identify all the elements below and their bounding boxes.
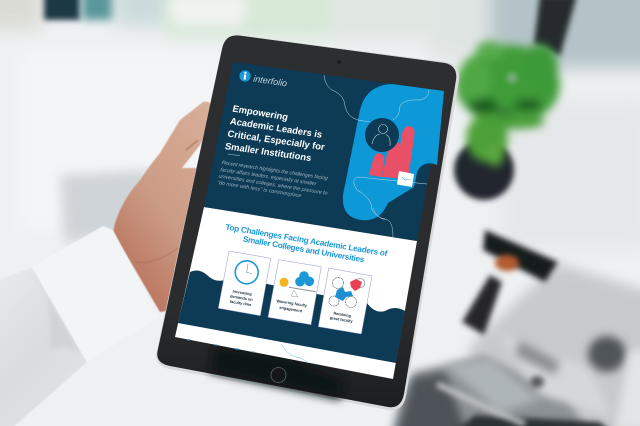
title: Empowering [232,103,290,122]
hand holding tablet [113,102,212,312]
thin blue curve in lower strip [282,344,307,362]
plant in dark pot [454,41,560,200]
thin decorative curve lines [324,75,429,219]
blue rounded shape [343,84,444,220]
intro paragraph [217,160,328,199]
icon: clock [235,261,258,284]
card: increasing demands on faculty time: faculty time [230,299,253,307]
tablet body [156,35,459,410]
title rule [228,154,240,156]
thin curve in navy to wave [373,208,393,237]
panel: navy header [204,62,444,241]
card: wavering faculty engagement: engagement [279,305,303,313]
blurred desk items: paper and laptop [390,230,640,426]
logo: interfolio: interfolio [253,74,288,89]
card: increasing demands on faculty time: Increasing [232,289,253,297]
card: increasing demands on faculty time [218,251,271,316]
icon: envelope card [397,171,414,187]
intro paragraph: "do more with less" is commonplace [217,180,302,199]
cut-off next heading marks [187,339,254,353]
card: wavering faculty engagement [268,260,321,325]
bar chart: red bars [369,126,415,180]
heading: top challenges: Top Challenges Facing Academic Leaders of [225,223,388,258]
icon: balance scale [280,271,316,297]
tablet screen infographic [175,62,444,379]
title: Critical, Especially for [227,128,326,152]
icon: puzzle people [329,278,365,308]
dark wave band [178,271,405,363]
title [224,103,326,163]
card: retaining great faculty: great faculty [329,315,354,324]
heading: top challenges: Smaller Colleges and Universities [242,235,366,264]
intro paragraph: faculty affairs leaders, especially at smaller [220,167,317,187]
camera [337,60,341,64]
home button [271,368,286,382]
title: Academic Leaders is [229,115,323,140]
card: wavering faculty engagement: Wavering faculty [276,298,308,308]
title: Smaller Institutions [224,140,313,163]
shirt sleeve [0,267,87,426]
card: retaining great faculty [318,268,372,334]
icon: person in circle [365,118,399,152]
card: increasing demands on faculty time: demands on [230,293,254,302]
panel: white page [175,207,417,379]
intro paragraph: Recent research highlights the challenges facing [221,160,328,182]
shirt cuff [32,226,158,362]
logo: interfolio [239,70,288,89]
card: retaining great faculty: Retaining [333,310,352,318]
intro paragraph: universities and colleges, where the pressure to [218,174,328,197]
